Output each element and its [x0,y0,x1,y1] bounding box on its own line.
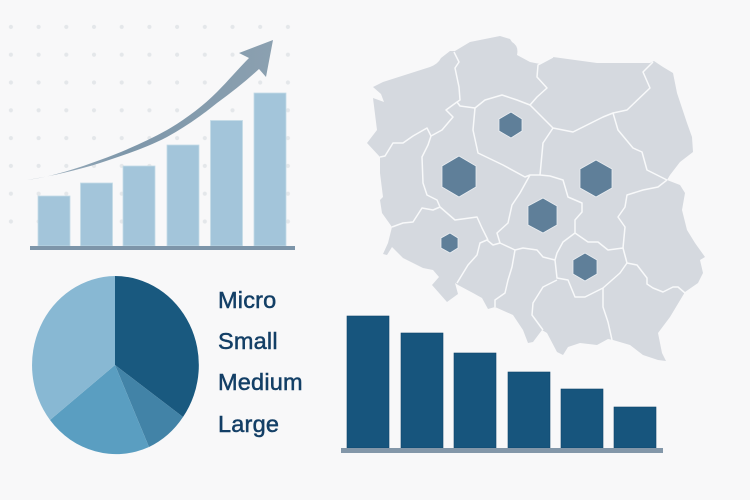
descending bars [347,316,656,448]
map of regions [367,36,705,361]
growth bar chart [27,40,295,250]
pie legend labels [218,287,303,437]
map silhouette [367,36,705,361]
label: Medium: Medium [218,369,303,395]
growth chart baseline [30,246,295,250]
descending bar chart [341,316,663,453]
growth bars [38,93,286,246]
pie chart [32,276,199,454]
label: Micro: Micro [218,287,276,313]
slice: dark [115,276,199,417]
slice: light blue [32,276,115,420]
descending chart baseline [341,448,663,453]
slice: medium blue [50,365,149,454]
region hexagons [441,112,612,281]
label: Small: Small [218,328,278,354]
growth arrow [27,40,273,180]
region borders [380,52,685,340]
label: Large: Large [218,411,279,437]
slice: teal [115,365,183,447]
